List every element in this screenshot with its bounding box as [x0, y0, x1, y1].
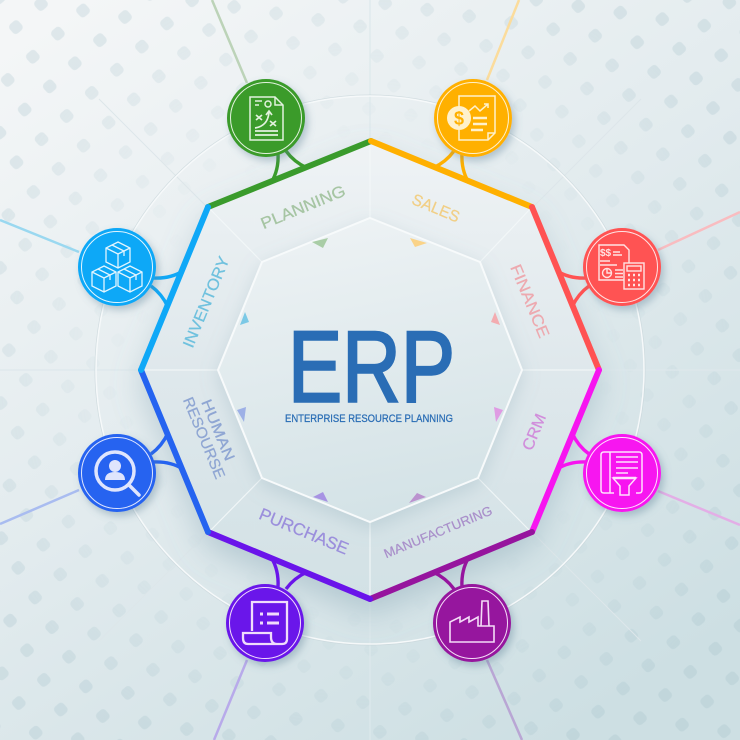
icon: sales	[434, 79, 512, 157]
outer octagon panel	[141, 141, 599, 600]
label: purchase: PURCHASE	[256, 505, 351, 558]
title: ERP: ERP	[288, 312, 455, 424]
label: human resourse: HUMAN	[197, 397, 238, 463]
icon: inventory	[78, 228, 156, 306]
subtitle: ENTERPRISE RESOURCE PLANNING	[285, 413, 453, 425]
label: sales: SALES	[409, 192, 462, 226]
label: crm: CRM	[520, 412, 550, 453]
icon: planning	[227, 79, 305, 157]
label: finance: FINANCE	[506, 262, 552, 341]
label: manufacturing: MANUFACTURING	[382, 503, 494, 561]
octagon coloured edges	[141, 141, 599, 599]
icon: sales: $	[454, 108, 464, 128]
sector dividers	[141, 141, 599, 600]
icon: crm	[583, 434, 661, 512]
connectors	[151, 151, 589, 589]
label: inventory: INVENTORY	[181, 254, 233, 350]
inner octagon	[218, 218, 522, 522]
label: planning: PLANNING	[259, 183, 348, 233]
sector pointers	[237, 238, 503, 503]
icon: human resource	[78, 434, 156, 512]
icon: purchase	[226, 584, 304, 662]
label: human resourse: RESOURSE	[179, 395, 228, 482]
icon: finance: $$	[600, 248, 612, 259]
icon: manufacturing	[433, 584, 511, 662]
icon: finance	[583, 228, 661, 306]
